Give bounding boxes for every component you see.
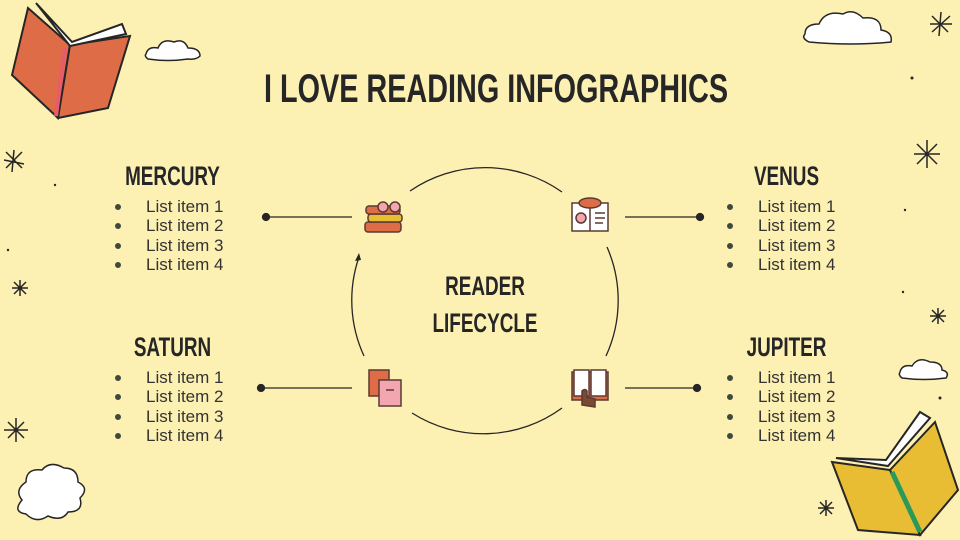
arrow head (355, 253, 361, 261)
text: JUPITER (747, 332, 826, 362)
text: List item 1 (758, 197, 835, 216)
center label: READER (445, 271, 525, 301)
text: List item 4 (146, 426, 223, 445)
text: MERCURY (125, 161, 220, 191)
icon: reading hand (572, 370, 608, 407)
text: List item 2 (758, 216, 835, 235)
text: List item 3 (146, 236, 223, 255)
center label: LIFECYCLE (432, 308, 538, 338)
cloud top right (804, 12, 891, 44)
center label (432, 271, 538, 338)
text: List item 1 (758, 368, 835, 387)
panel: saturn (115, 332, 223, 445)
icon: books with glasses (365, 202, 402, 232)
panel: mercury (115, 161, 223, 274)
connectors (258, 214, 704, 392)
icon: stacked books (369, 370, 401, 406)
cloud right (899, 360, 947, 380)
text: List item 4 (146, 255, 223, 274)
text: List item 2 (146, 387, 223, 406)
text: List item 4 (758, 426, 835, 445)
text: VENUS (754, 161, 819, 191)
text: SATURN (134, 332, 211, 362)
cloud top left (145, 41, 200, 60)
text: List item 3 (758, 407, 835, 426)
title: I LOVE READING INFOGRAPHICS (264, 67, 728, 111)
text: List item 4 (758, 255, 835, 274)
text: List item 3 (146, 407, 223, 426)
text: List item 2 (146, 216, 223, 235)
panel: jupiter (727, 332, 835, 445)
book: bottom right (832, 412, 958, 535)
text: List item 1 (146, 368, 223, 387)
book: top left (12, 3, 130, 118)
cloud bottom left (18, 464, 85, 520)
text: List item 3 (758, 236, 835, 255)
icon: book with hat (572, 198, 608, 231)
text: List item 2 (758, 387, 835, 406)
text: List item 1 (146, 197, 223, 216)
lifecycle circle arcs (352, 168, 618, 434)
panel: venus (727, 161, 835, 274)
